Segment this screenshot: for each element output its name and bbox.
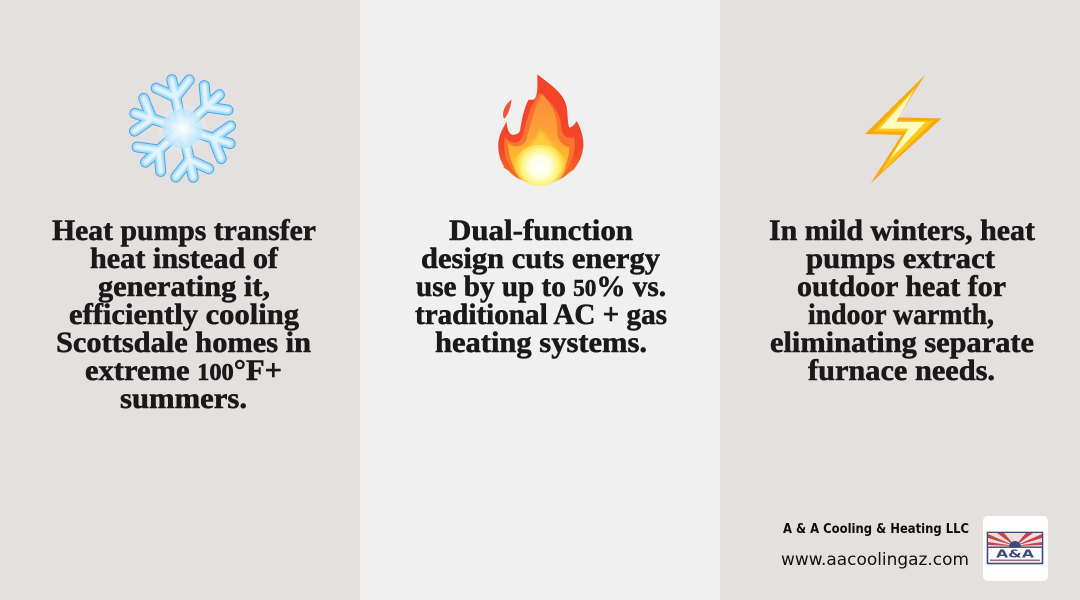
text block: left column: extreme 100°F+ [85, 354, 282, 387]
text block: left column: generating it, [98, 270, 270, 303]
text block: right column: pumps extract [806, 242, 995, 275]
company name: A & A Cooling & Heating LLC [783, 521, 969, 537]
icon: lightning bolt [865, 75, 942, 183]
text block: right column: In mild winters, heat [769, 214, 1035, 247]
text block: right column: furnace needs. [808, 354, 995, 387]
text block: right column: indoor warmth, [808, 298, 994, 331]
text block: left column: Heat pumps transfer [52, 214, 316, 247]
icon: snowflake [121, 69, 244, 188]
text block: left column [52, 214, 316, 415]
text block: middle column: use by up to 50% vs. [416, 270, 666, 303]
text block: middle column [415, 214, 667, 359]
text block: middle column: design cuts energy [421, 242, 660, 275]
text block: right column: eliminating separate [770, 326, 1034, 359]
text block: middle column: Dual-function [449, 214, 633, 247]
logo: frame [988, 532, 1042, 564]
logo card [983, 516, 1048, 581]
text block: left column: heat instead of [90, 242, 279, 275]
text block: left column: summers. [120, 382, 247, 415]
panel: middle background [360, 0, 720, 600]
text block: middle column: traditional AC + gas [415, 298, 667, 331]
logo: sun rays [988, 533, 1042, 548]
icon: flame [498, 74, 583, 186]
panel: left background [0, 0, 360, 600]
text block: right column [769, 214, 1035, 387]
text block: left column: efficiently cooling [69, 298, 299, 331]
text block: right column: outdoor heat for [797, 270, 1006, 303]
text block: middle column: heating systems. [435, 326, 647, 359]
website: www.aacoolingaz.com [781, 550, 969, 570]
logo: lettering: A&A [996, 548, 1035, 560]
panel: right background [720, 0, 1080, 600]
text block: left column: Scottsdale homes in [56, 326, 311, 359]
